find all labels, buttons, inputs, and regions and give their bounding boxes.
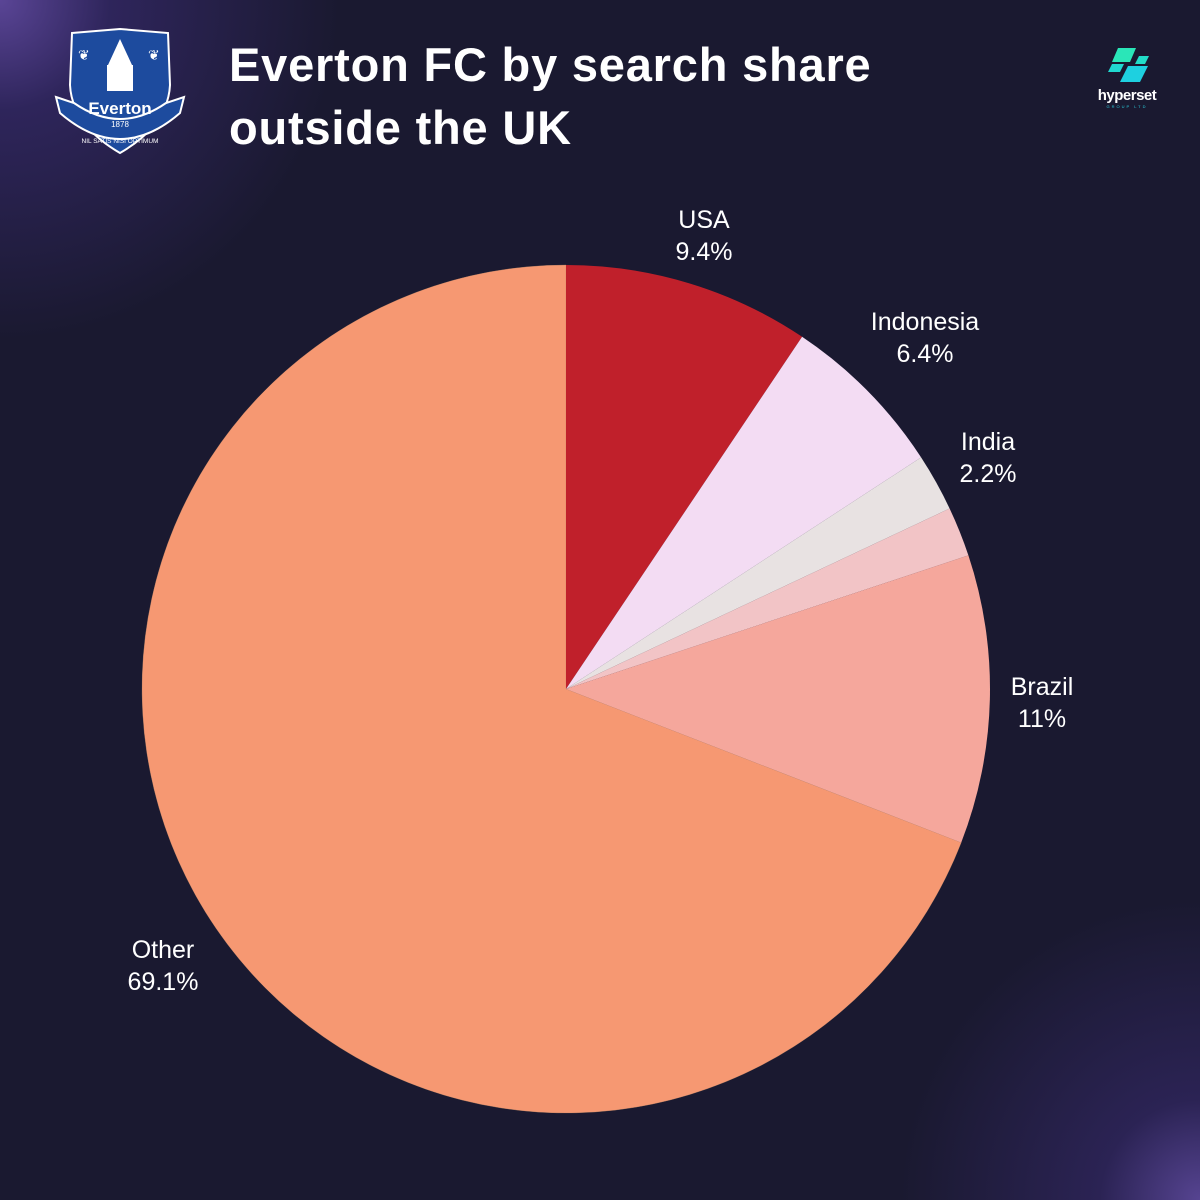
slice: Brazil bbox=[566, 555, 990, 843]
icon: Everton crest: ❦ bbox=[148, 47, 160, 63]
labels: 6.4% bbox=[897, 340, 953, 368]
slice: Indonesia bbox=[566, 337, 921, 689]
slice: Other bbox=[142, 265, 961, 1113]
icon: Everton crest: ❦ bbox=[78, 47, 90, 63]
icon: Everton crest: NIL SATIS NISI OPTIMUM bbox=[82, 138, 158, 145]
labels: 2.2% bbox=[960, 460, 1016, 488]
labels bbox=[128, 206, 1073, 996]
labels: Indonesia bbox=[871, 308, 979, 336]
icon: Everton crest bbox=[54, 28, 186, 154]
labels: India bbox=[961, 428, 1015, 456]
labels: 11% bbox=[1018, 705, 1066, 733]
labels: Other bbox=[132, 936, 194, 964]
icon: hyperset logo: hyperset bbox=[1098, 87, 1156, 104]
labels: Brazil bbox=[1011, 673, 1073, 701]
icon: Everton crest: 1878 bbox=[111, 120, 129, 129]
title bbox=[229, 38, 872, 154]
icon: hyperset logo: GROUP LTD bbox=[1107, 104, 1147, 109]
slice: India bbox=[566, 457, 950, 689]
icon: Everton crest: Everton bbox=[88, 99, 152, 118]
labels: 9.4% bbox=[676, 238, 732, 266]
slice: small unlabeled bbox=[566, 508, 968, 689]
title: Everton FC by search share bbox=[229, 38, 872, 91]
icon: hyperset logo bbox=[1098, 48, 1157, 109]
slice: USA bbox=[566, 265, 802, 689]
labels: 69.1% bbox=[128, 968, 198, 996]
title: outside the UK bbox=[229, 101, 572, 154]
labels: USA bbox=[678, 206, 730, 234]
